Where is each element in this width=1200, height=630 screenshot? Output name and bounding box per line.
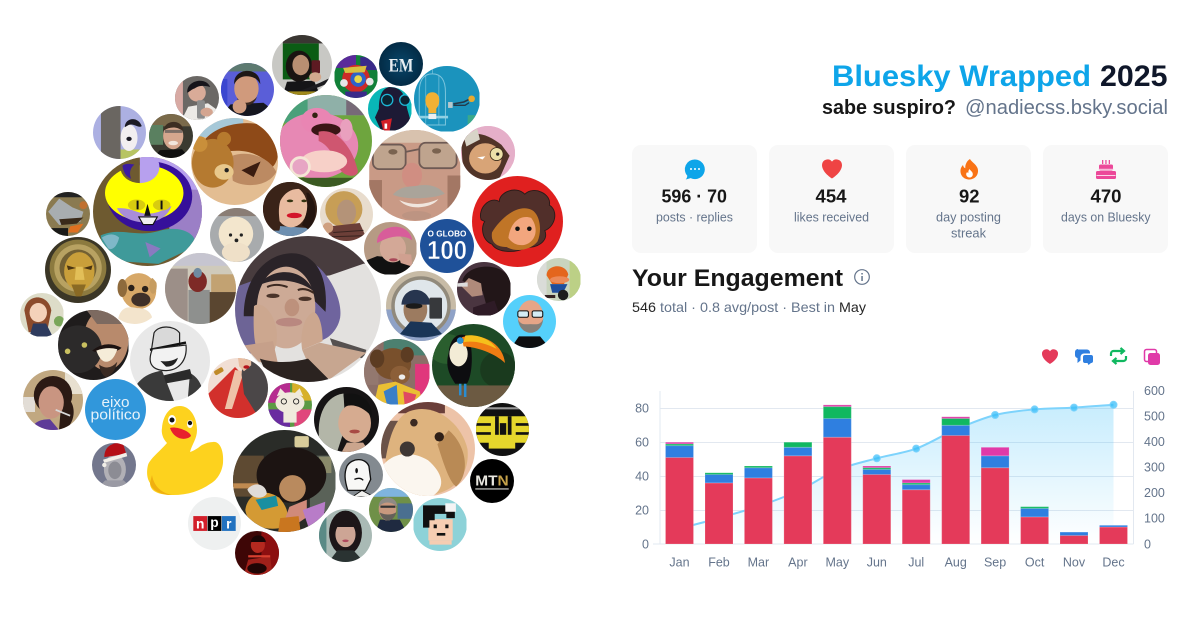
engagement summary: total · 0.8 avg/post · Best in [660, 299, 835, 315]
profile name and handle: sabe suspiro? [822, 97, 956, 119]
month labels: Mar [748, 556, 769, 570]
profile name and handle: @nadiecss.bsky.social [965, 97, 1168, 119]
bar: Aug [942, 417, 970, 544]
legend: quotes copy [1144, 350, 1160, 365]
left axis labels: 0 [642, 538, 649, 552]
stat card: day posting streak: streak [951, 226, 987, 240]
legend: likes heart [1042, 349, 1058, 364]
avatar: colourful cat [268, 383, 312, 427]
right axis labels: 400 [1144, 435, 1165, 449]
month labels: Nov [1063, 556, 1086, 570]
avatar: O Globo 100 logo: O GLOBO [428, 229, 466, 238]
bar: Mar [744, 466, 772, 544]
stat card: likes received [769, 145, 894, 253]
avatar: black and yellow logo [476, 403, 529, 456]
avatar: red lit woman [235, 531, 279, 575]
cumulative points [873, 401, 1117, 462]
cumulative line [680, 405, 1114, 529]
legend: reposts arrows [1111, 348, 1126, 364]
month labels: Feb [708, 556, 730, 570]
avatar: pink haired woman [364, 222, 416, 274]
avatar: EM logo: EM [389, 55, 413, 75]
stat card: posts and replies: 596 · 70 [662, 186, 727, 206]
avatar: selfie in round mirror [386, 271, 456, 341]
icon: speech bubble [685, 159, 705, 180]
avatar: mirror selfie on green wall [272, 35, 332, 95]
avatar: eixo politico logo: político [90, 407, 141, 423]
avatar: brown dog in colourful shirt [364, 339, 430, 404]
icon: info [855, 270, 869, 284]
avatar: golden dog [381, 402, 475, 496]
bar: Apr [784, 442, 812, 544]
avatar cluster [20, 35, 580, 575]
right axis labels: 300 [1144, 460, 1165, 474]
avatar: eixo politico logo: eixo [101, 395, 130, 411]
profile name and handle [822, 97, 1168, 119]
title: 2025 [1100, 60, 1168, 93]
avatar: woman with black and grey hair [314, 386, 379, 452]
left axis labels: 80 [635, 402, 649, 416]
stat card: posts and replies [632, 145, 757, 253]
bar: Jul [902, 480, 930, 544]
avatar: toon with pink cap [461, 126, 515, 180]
avatar: anime girl [20, 293, 64, 336]
month labels: Jan [669, 556, 690, 570]
cumulative area [680, 405, 1114, 544]
avatar: cartoon of red dress woman [208, 358, 268, 418]
legend: replies bubbles [1075, 349, 1093, 365]
avatar: teddy bear and sleeping man painting [191, 118, 278, 205]
bar: May [823, 405, 851, 544]
avatar: room with fridge [165, 253, 236, 324]
avatar: dark haired man in profile [457, 262, 510, 316]
avatar: woman with curly hair and thermometer [23, 370, 83, 430]
avatar: crash bandicoot [537, 258, 580, 301]
icon: cake [1096, 160, 1116, 179]
bar: Dec [1100, 525, 1128, 544]
month labels: May [825, 556, 850, 570]
avatar: MTN logo [470, 459, 514, 503]
avatar: O Globo 100 logo [420, 219, 474, 273]
avatar: toucan [432, 324, 515, 407]
right axis labels: 600 [1144, 384, 1165, 398]
avatar: engraving of man in bowler hat [130, 321, 210, 401]
avatar: snoopy behind tree [93, 106, 146, 159]
avatar: eixo politico logo [85, 379, 146, 440]
avatar: red curly hair cartoon [472, 176, 563, 267]
chart grid and axes [653, 391, 1134, 544]
engagement summary: May [839, 299, 866, 315]
avatar: action movie scene [233, 430, 336, 532]
avatar: skull moon illustration [93, 157, 202, 266]
avatar: pixel art face [413, 498, 467, 551]
avatar: man with glasses, blue light [221, 63, 274, 116]
avatar: smiling man with glasses [149, 114, 193, 158]
avatar: NPR logo [188, 497, 241, 550]
right axis labels: 500 [1144, 410, 1165, 424]
avatar: bearded man outdoors [369, 488, 413, 532]
avatar: colourful clock badge [334, 55, 378, 98]
right axis labels [1144, 384, 1165, 552]
icon: rubber duck [147, 406, 224, 495]
month labels: Jun [867, 556, 887, 570]
bar: Jan [666, 442, 694, 544]
avatar: santa hat [92, 443, 136, 487]
avatar: NPR logo: n [196, 516, 204, 531]
avatar: man with black cat [58, 310, 128, 380]
avatar: dragon creature [46, 192, 90, 236]
avatar: O Globo 100 logo: 100 [427, 237, 467, 265]
month labels [669, 556, 1125, 570]
icon: heart [822, 159, 842, 178]
stat card: day posting streak: 92 [959, 186, 980, 206]
stat card: likes received: likes received [794, 210, 869, 224]
bar: Jun [863, 466, 891, 544]
avatar: golden mask [45, 237, 111, 303]
avatar: darth vader with glasses [368, 87, 412, 130]
left axis labels: 40 [635, 470, 649, 484]
avatar: bald bearded man cartoon [503, 295, 556, 348]
right axis labels: 200 [1144, 486, 1165, 500]
avatar: woman with dark bangs [319, 509, 372, 562]
avatar: MTN logo: MTN [475, 472, 509, 489]
month labels: Oct [1025, 556, 1045, 570]
right axis labels: 100 [1144, 512, 1165, 526]
avatar: older man with moustache [369, 130, 460, 221]
month labels: Jul [908, 556, 924, 570]
stat card: days on Bluesky [1043, 145, 1168, 253]
stat card: posts and replies: posts · replies [656, 210, 733, 224]
heading: your engagement: Your Engagement [632, 265, 843, 292]
chart: monthly engagement [635, 384, 1165, 570]
avatar: NPR logo: p [210, 515, 219, 530]
avatar: selfie with phone [175, 76, 219, 120]
bar: Feb [705, 473, 733, 544]
left axis labels: 20 [635, 504, 649, 518]
legend icons [1042, 348, 1160, 365]
avatar: blonde curly hair person [320, 188, 373, 241]
stat card: day posting streak [906, 145, 1031, 253]
right axis labels: 0 [1144, 538, 1151, 552]
month labels: Dec [1102, 556, 1125, 570]
stat card: days on Bluesky: days on Bluesky [1061, 210, 1151, 224]
stat card: likes received: 454 [816, 186, 846, 206]
month labels: Aug [945, 556, 967, 570]
bar: Nov [1060, 532, 1088, 544]
avatar: fluffy white dog [210, 208, 264, 262]
avatar: lickitung [280, 95, 372, 187]
engagement summary: 546 [632, 299, 656, 315]
avatar: chihuahua [118, 273, 157, 324]
icon: flame [960, 159, 978, 180]
left axis labels [635, 402, 649, 552]
title: Bluesky Wrapped [832, 60, 1091, 93]
stat card: days on Bluesky: 470 [1090, 186, 1122, 206]
avatar: EM logo [379, 42, 423, 86]
avatar: woman with red lips [263, 182, 317, 236]
avatar: NPR logo: r [226, 516, 232, 531]
avatar: grey cartoon face [339, 453, 383, 497]
bar: Oct [1021, 507, 1049, 544]
left axis labels: 60 [635, 436, 649, 450]
month labels: Apr [788, 556, 808, 570]
bar: Sep [981, 447, 1009, 544]
stat card: day posting streak: day posting [936, 210, 1001, 224]
avatar: central large portrait [235, 236, 381, 382]
month labels: Sep [984, 556, 1006, 570]
avatar: light bulb in bird cage [414, 66, 480, 132]
